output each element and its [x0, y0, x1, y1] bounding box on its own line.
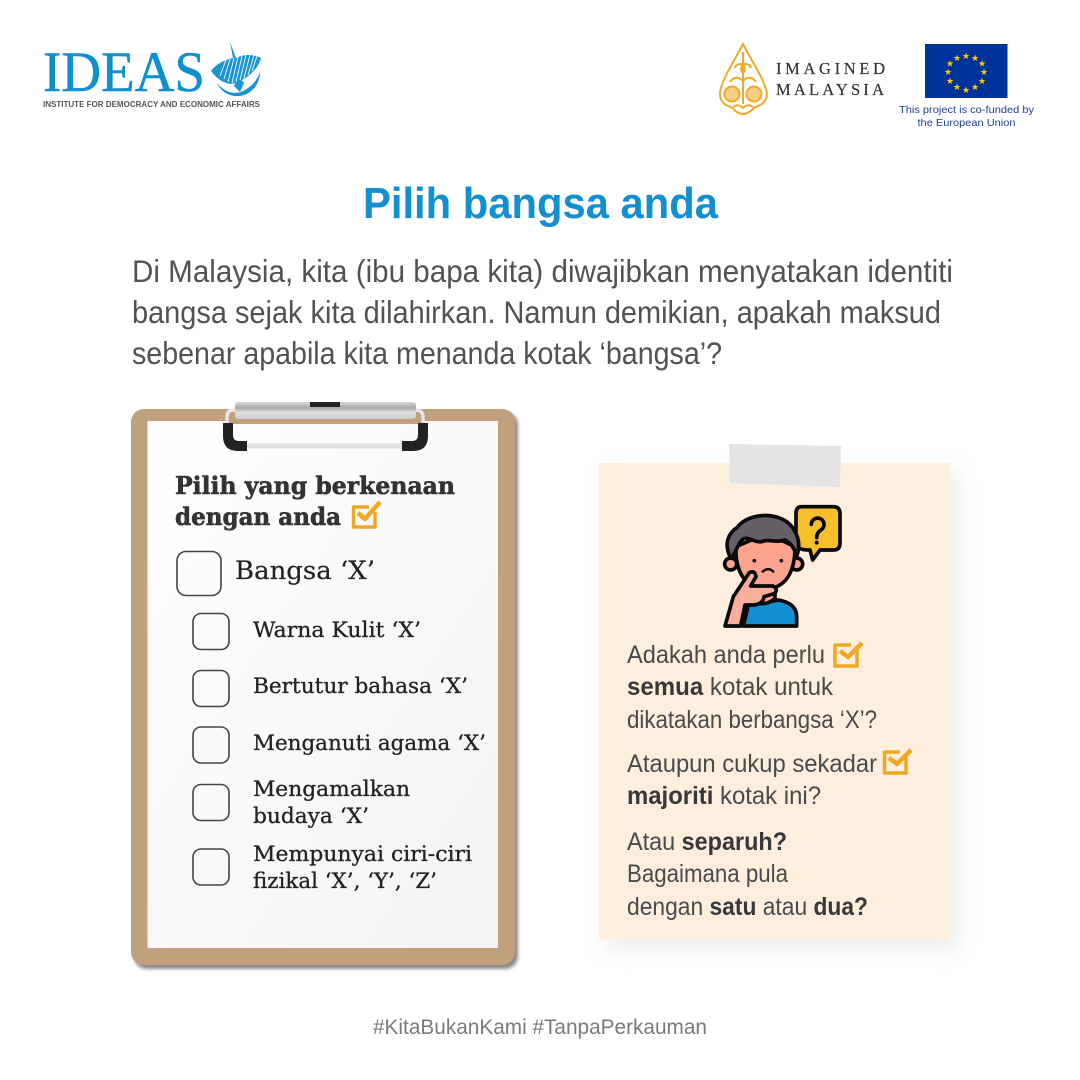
title: Pilih bangsa anda — [363, 179, 718, 228]
flag stars: ★ — [978, 77, 986, 87]
clipboard board — [131, 409, 515, 965]
icon: thinking person — [725, 507, 840, 626]
option: Bertutur bahasa — [193, 670, 468, 706]
hair — [727, 515, 799, 558]
form heading — [175, 471, 455, 531]
face — [736, 533, 795, 589]
form heading: Pilih yang berkenaan — [175, 471, 455, 500]
logo: IDEAS — [43, 41, 261, 109]
panel: note card — [599, 444, 957, 948]
card shadow — [606, 472, 957, 948]
co-funding note: This project is co-funded by — [899, 104, 1035, 116]
flag stars: ★ — [978, 60, 986, 70]
logo bird icon — [211, 42, 261, 96]
question 1: dikatakan berbangsa ‘X’? — [627, 706, 877, 734]
panel: clipboard — [131, 402, 518, 969]
neck — [757, 590, 775, 604]
option: Mengamalkan budaya: Mengamalkan — [253, 777, 410, 801]
question 3: dengan satu atau dua? — [627, 893, 868, 921]
option: Menganuti agama: Menganuti agama ‘X’ — [253, 731, 486, 755]
question 2 — [627, 750, 877, 810]
flag stars: ★ — [962, 86, 970, 96]
flag stars: ★ — [962, 52, 970, 62]
option: Menganuti agama — [193, 727, 486, 763]
flag stars: ★ — [953, 54, 961, 64]
flag stars: ★ — [971, 54, 979, 64]
flag stars: ★ — [971, 83, 979, 93]
torso — [743, 600, 797, 626]
form heading: dengan anda — [175, 502, 341, 531]
option: Warna Kulit: Warna Kulit ‘X’ — [253, 618, 421, 642]
option: Mengamalkan budaya: budaya ‘X’ — [253, 804, 369, 828]
hand and arm — [725, 572, 776, 626]
card — [599, 463, 950, 939]
icon: orange tick 2 — [835, 643, 862, 666]
logo: Imagined Malaysia — [720, 44, 885, 114]
flag stars: ★ — [953, 83, 961, 93]
option: Mengamalkan budaya — [193, 777, 410, 828]
icon: orange tick 3 — [884, 750, 911, 773]
flag stars — [944, 52, 988, 96]
intro text: bangsa sejak kita dilahirkan. Namun demikian, apakah maksud — [132, 294, 941, 330]
flag stars: ★ — [944, 68, 952, 78]
flag stars: ★ — [946, 77, 954, 87]
option: Mempunyai ciri-ciri: fizikal ‘X’, ‘Y’, ‘Z’ — [253, 869, 437, 893]
question 1: Adakah anda perlu — [627, 641, 825, 669]
logo tagline: INSTITUTE FOR DEMOCRACY AND ECONOMIC AFFAIRS — [43, 100, 261, 109]
question 1 — [627, 641, 877, 734]
logo wordmark: IDEAS — [43, 41, 205, 104]
tape — [729, 444, 841, 487]
option: Mempunyai ciri-ciri — [193, 842, 472, 893]
speech bubble — [796, 507, 840, 560]
ears — [725, 558, 737, 570]
clip — [223, 402, 428, 451]
option: Warna Kulit — [193, 614, 421, 650]
option: Bangsa X: Bangsa ‘X’ — [235, 556, 375, 585]
eyes and mouth — [753, 560, 755, 562]
question 1: semua kotak untuk — [627, 673, 833, 701]
flag stars: ★ — [946, 60, 954, 70]
question 3 — [627, 828, 868, 921]
question 2: majoriti kotak ini? — [627, 782, 821, 810]
question 3: Bagaimana pula — [627, 860, 788, 888]
option: Bertutur bahasa: Bertutur bahasa ‘X’ — [253, 674, 468, 698]
question 2: Ataupun cukup sekadar — [627, 750, 877, 778]
option: Bangsa X — [177, 552, 375, 596]
wordmark line 2: MALAYSIA — [776, 80, 884, 99]
question 3: Atau separuh? — [627, 828, 787, 856]
co-funding note: the European Union — [918, 117, 1016, 129]
hashtags: #KitaBukanKami #TanpaPerkauman — [373, 1016, 707, 1039]
intro text: Di Malaysia, kita (ibu bapa kita) diwajibkan menyatakan identiti — [132, 253, 953, 289]
wordmark line 1: IMAGINED — [776, 59, 885, 78]
paper sheet — [148, 421, 498, 948]
option: Mempunyai ciri-ciri: Mempunyai ciri-ciri — [253, 842, 472, 866]
icon: orange tick — [354, 502, 380, 527]
clipboard shadow — [134, 412, 518, 969]
intro text: sebenar apabila kita menanda kotak ‘bangsa’? — [132, 335, 722, 371]
icon: gold wayang leaf — [720, 44, 767, 114]
co-funding note — [899, 104, 1035, 129]
flag stars: ★ — [980, 68, 988, 78]
logo: EU flag — [899, 44, 1035, 129]
intro text — [132, 253, 953, 371]
